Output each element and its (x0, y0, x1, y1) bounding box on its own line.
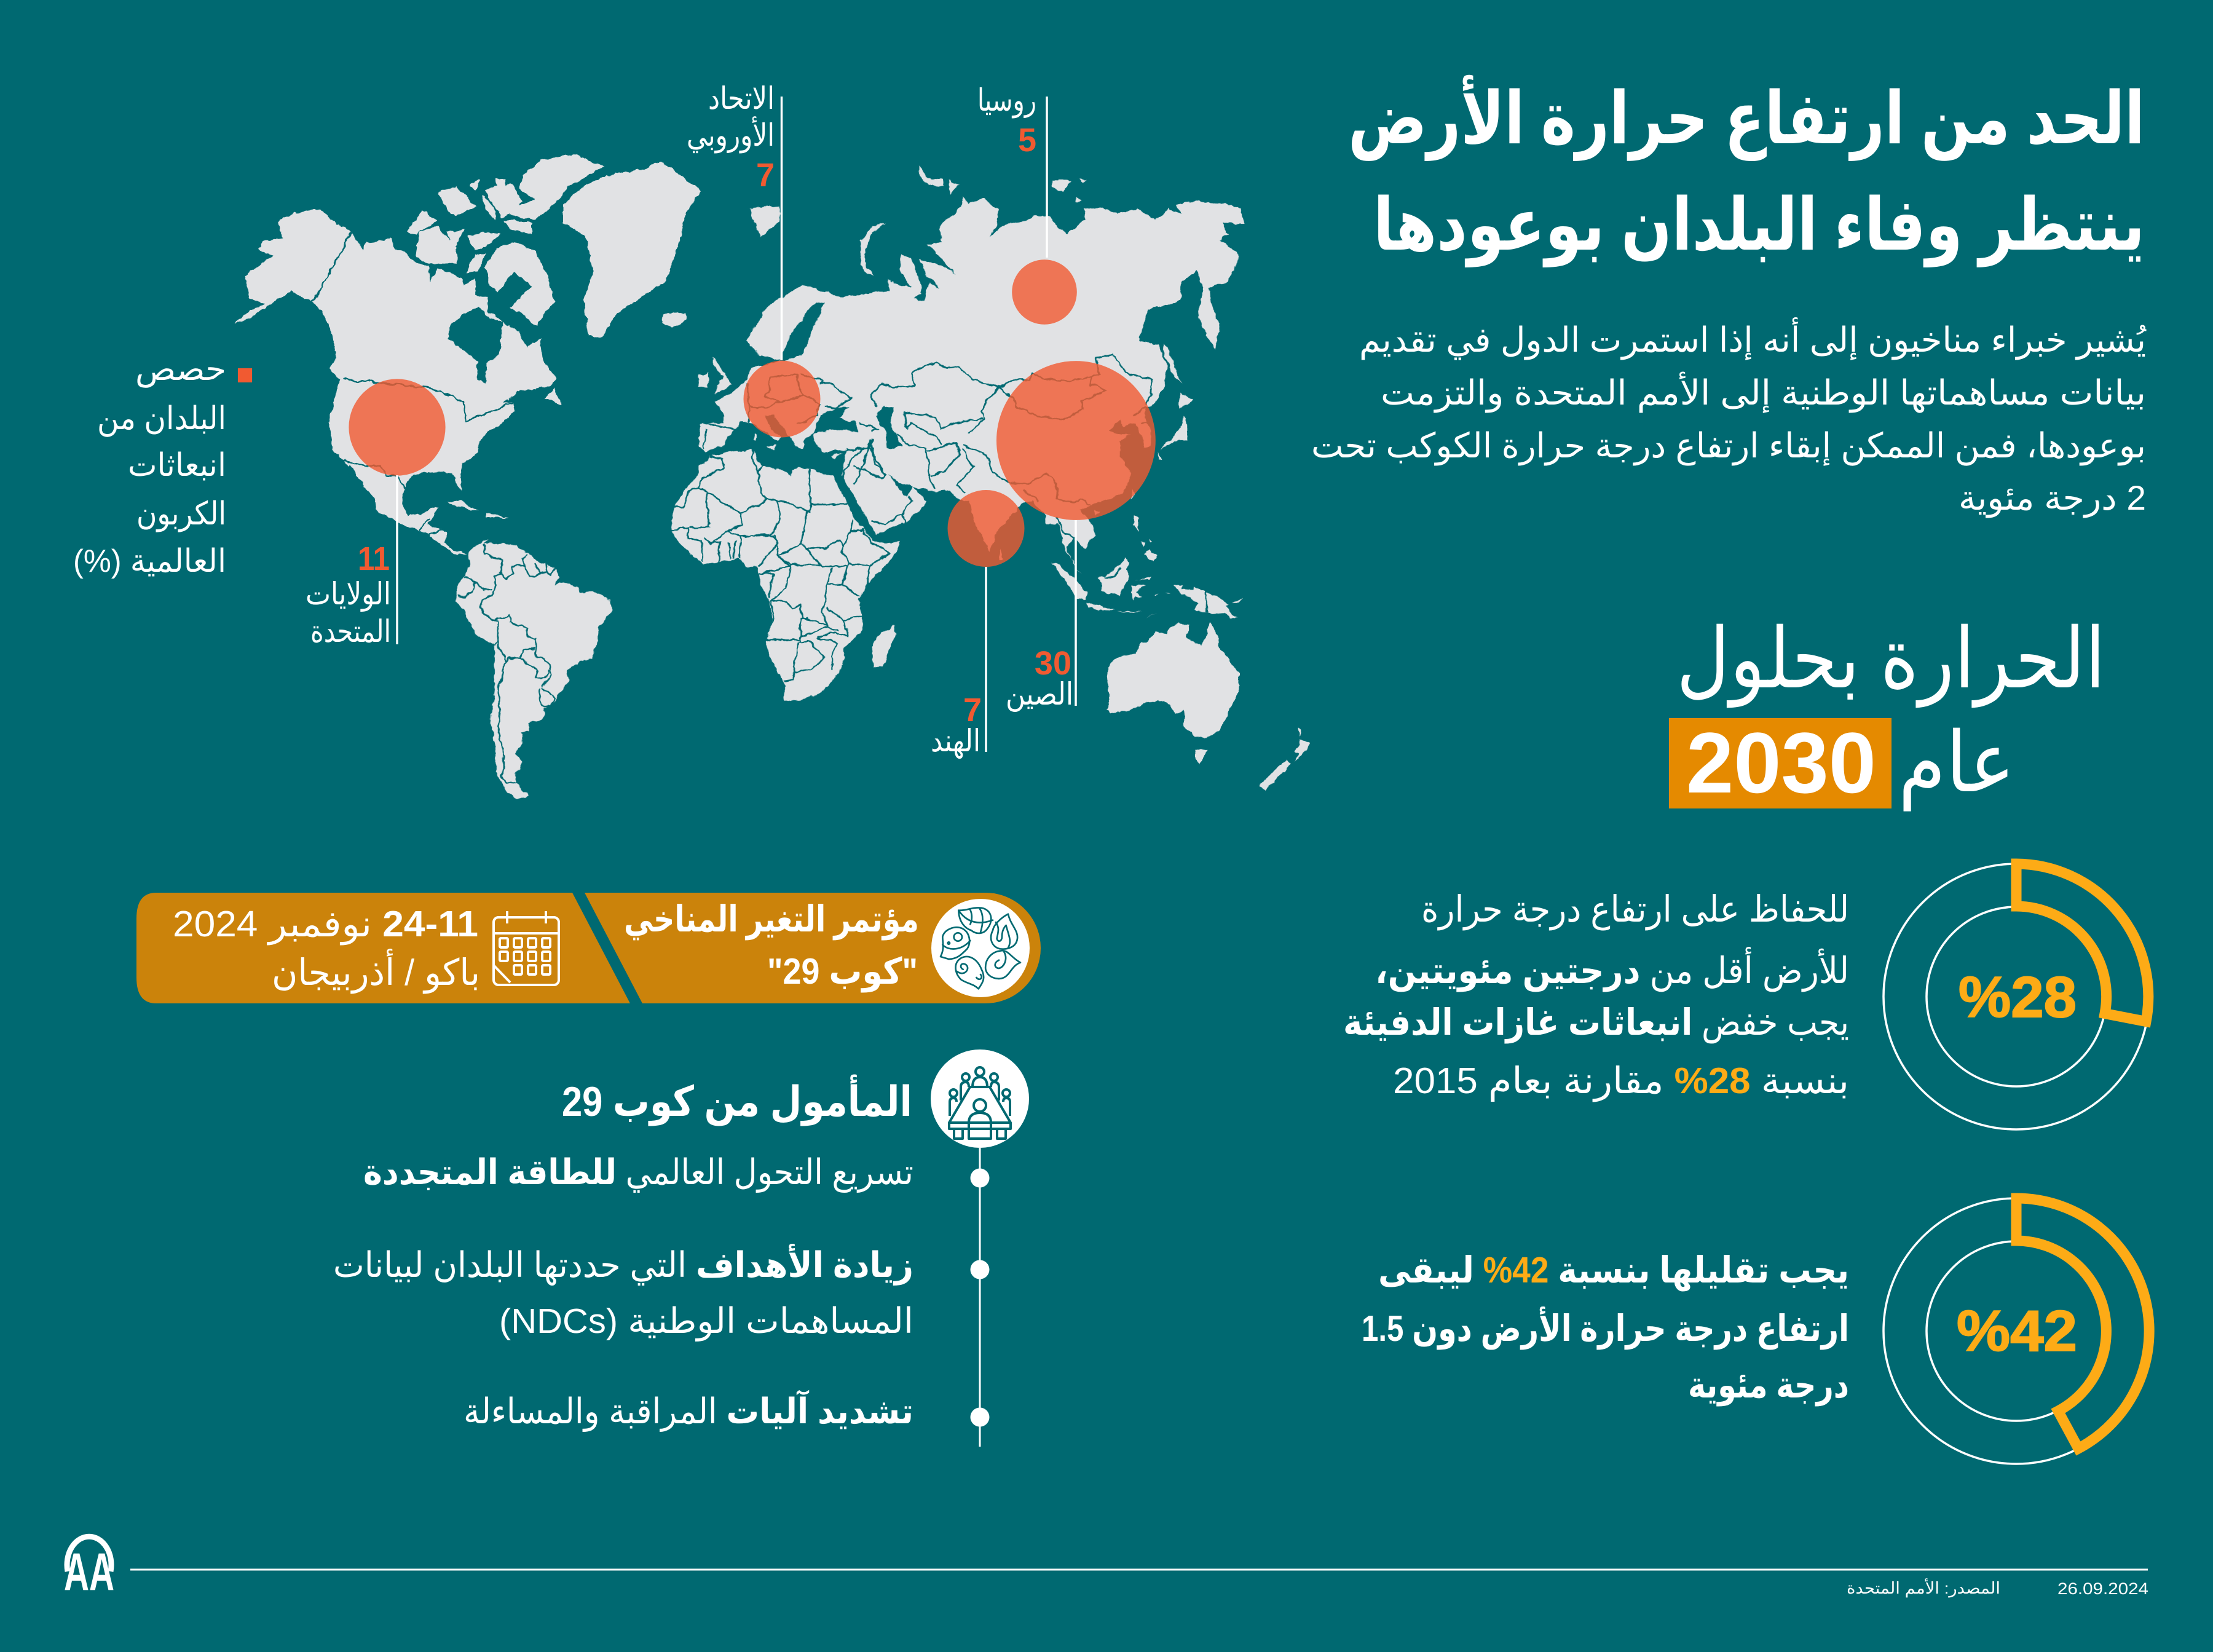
text: 42% target: ارتفاع درجة حرارة الأرض دون 1.5 (1362, 1306, 1849, 1350)
text: 42% target: درجة مئوية (1688, 1365, 1849, 1407)
map legend: حصص (135, 352, 226, 388)
text: 28% target: يجب خفض انبعاثات غازات الدفيئة (1343, 1002, 1849, 1044)
text: 42% target (1362, 1250, 1849, 1407)
map: Africa, Europe and Asia (671, 165, 1244, 702)
bubble: India 7% (948, 490, 1024, 567)
logo: AA: AA (64, 1543, 114, 1602)
logo: AA (64, 1536, 114, 1602)
callout: Russia (977, 83, 1047, 258)
section heading: 2030 solutions: عام (1898, 716, 2015, 812)
banner text: conference name: "كوب 29" (767, 951, 918, 993)
banner text: conference name (624, 899, 919, 993)
callout: European Union (687, 81, 782, 360)
list item 2: زيادة الأهداف التي حددتها البلدان لبيانات (333, 1244, 913, 1286)
intro paragraph: 2 درجة مئوية (1959, 478, 2146, 518)
map legend (73, 352, 252, 579)
section heading: 2030 solutions: 2030 (1686, 714, 1876, 811)
list item 3: تشديد آليات المراقبة والمساءلة (464, 1389, 913, 1432)
text: 28% target: بنسبة %28 مقارنة بعام 2015 (1393, 1061, 1849, 1102)
callout: China (1006, 520, 1076, 712)
callout: European Union: الاتحاد (708, 81, 775, 116)
callout: Russia: 5 (1018, 122, 1036, 159)
donut chart: 28%: %28 (1959, 965, 2077, 1029)
callout: China: 30 (1035, 645, 1071, 682)
source credit: المصدر: الأمم المتحدة (1847, 1578, 2000, 1598)
callout: United States: 11 (358, 540, 390, 577)
callout: India: 7 (963, 692, 982, 729)
callout: United States: الولايات (306, 577, 391, 612)
donut chart: 42% (1884, 1198, 2149, 1464)
text: 28% target: للحفاظ على ارتفاع درجة حرارة (1421, 889, 1849, 931)
bubble: European Union 7% (744, 360, 820, 438)
donut chart: 28% (1884, 864, 2149, 1129)
callout: United States: المتحدة (310, 614, 391, 649)
map legend: البلدان من (97, 401, 226, 437)
timeline line (979, 1148, 981, 1447)
map legend: العالمية (%) (73, 543, 226, 579)
bubble: China 30% (996, 361, 1156, 520)
world map (234, 154, 1311, 799)
map legend: انبعاثات (128, 448, 226, 483)
title (1348, 74, 2145, 267)
section heading: 2030 solutions (1669, 612, 2105, 812)
date: 26.09.2024 (2057, 1579, 2148, 1598)
intro paragraph: بوعودها، فمن الممكن إبقاء ارتفاع درجة حرارة الكوكب تحت (1311, 426, 2146, 467)
bubble: United States 11% (349, 379, 446, 476)
list item 2: المساهمات الوطنية (NDCs) (499, 1302, 913, 1342)
callout: Russia: روسيا (977, 83, 1036, 119)
list item 2 (333, 1244, 989, 1342)
intro paragraph: يُشير خبراء مناخيون إلى أنه إذا استمرت الدول في تقديم (1359, 317, 2147, 361)
map: South America (456, 539, 612, 799)
banner text: date and place (173, 904, 480, 994)
intro paragraph (1311, 317, 2147, 518)
map: Southeast Asia, Australia and New Zealand (1051, 515, 1311, 790)
section heading: 2030 solutions: الحرارة بحلول (1676, 612, 2105, 708)
donut chart: 42%: %42 (1957, 1298, 2077, 1363)
banner text: date and place: 24-11 نوفمبر 2024 (173, 904, 478, 946)
callout: United States (306, 475, 397, 649)
icon: meeting table (931, 1049, 1029, 1148)
callout: India (931, 567, 986, 759)
callout: European Union: الأوروبي (687, 116, 775, 154)
icon: calendar (494, 911, 559, 985)
banner text: date and place: باكو / أذربيجان (272, 949, 480, 994)
text: 28% target: للأرض أقل من درجتين مئويتين، (1375, 947, 1849, 992)
icon: COP29 leaf emblem (931, 899, 1030, 997)
map: North America and Greenland (234, 154, 701, 555)
heading: hopes from COP29: المأمول من كوب 29 (562, 1074, 912, 1126)
banner text: conference name: مؤتمر التغير المناخي (624, 899, 919, 941)
text: 42% target: يجب تقليلها بنسبة %42 ليبقى (1378, 1250, 1849, 1292)
callout: China: الصين (1006, 677, 1073, 712)
callout: India: الهند (931, 724, 980, 759)
list item 1: تسريع التحول العالمي للطاقة المتجددة (363, 1153, 913, 1193)
COP29 banner (136, 893, 1041, 1003)
intro paragraph: بيانات مساهماتها الوطنية إلى الأمم المتحدة والتزمت (1381, 371, 2146, 414)
bubble: Russia 5% (1012, 259, 1077, 325)
callout: European Union: 7 (756, 157, 775, 194)
map legend: الكربون (136, 496, 226, 532)
footer rule (130, 1569, 2148, 1570)
text: 28% target (1343, 889, 1849, 1102)
